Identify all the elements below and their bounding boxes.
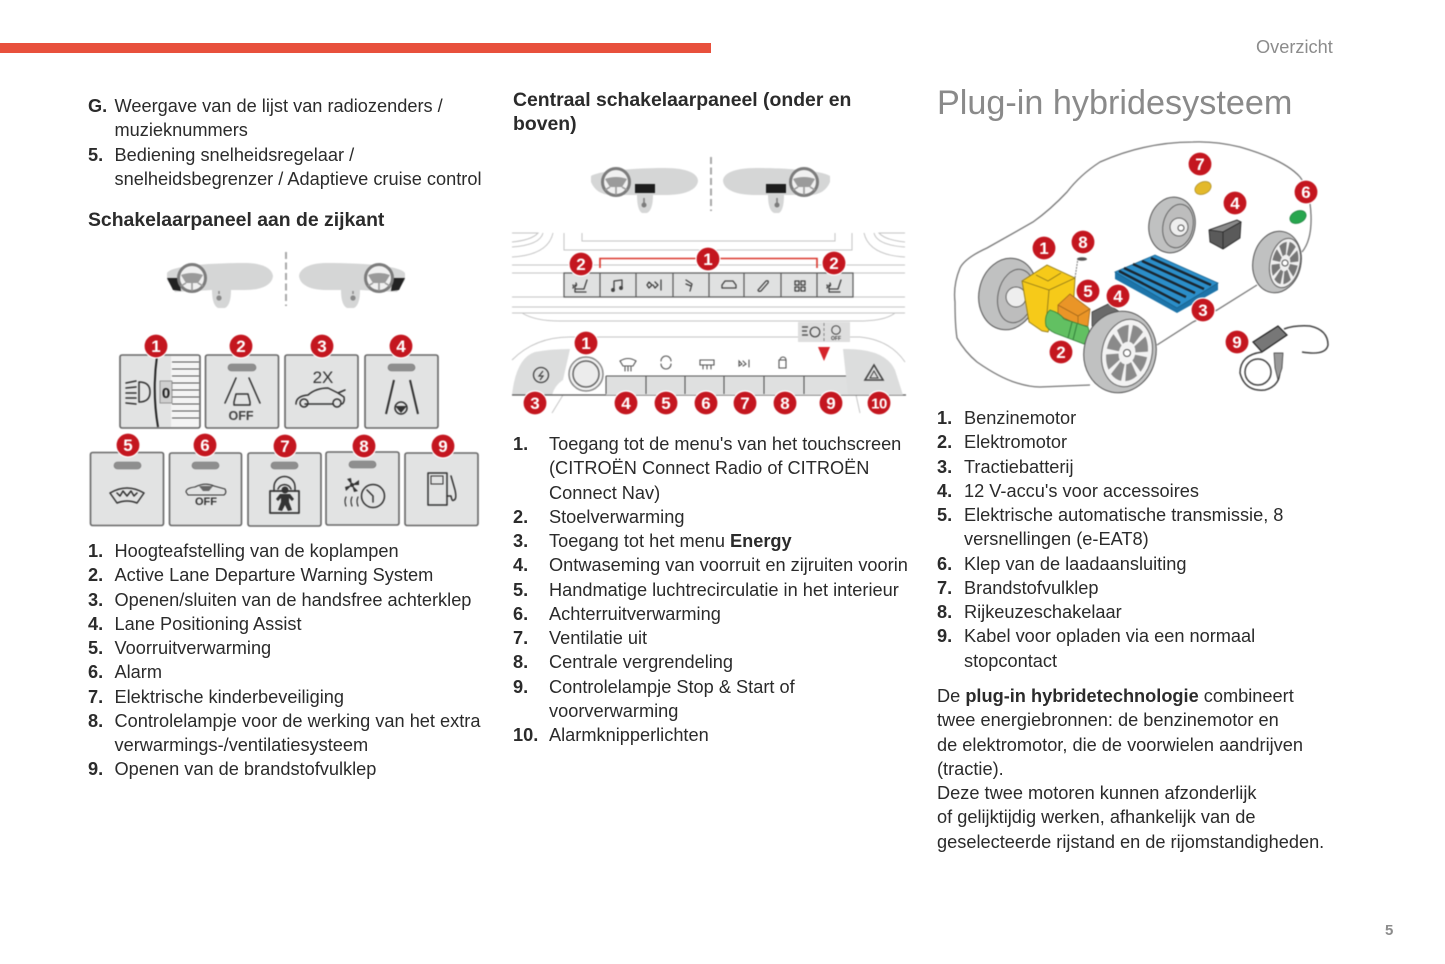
badge 2 left [569, 252, 593, 276]
12V battery front [1092, 304, 1120, 332]
list: central switch panel legend: 4. [513, 555, 528, 575]
list: side switch panel legend [88, 541, 480, 779]
list: hybrid system legend: 12 V-accu's voor accessoires [964, 481, 1199, 501]
list: central switch panel legend: 6. [513, 604, 528, 624]
green electric motor [1046, 310, 1089, 344]
text block: continued list G and 5: 5. [88, 145, 103, 165]
list: central switch panel legend: voorverwarming [549, 701, 678, 721]
callout 6: 6 [1301, 183, 1311, 202]
list: side switch panel legend: Controlelampje voor de werking van het extra [114, 711, 480, 731]
text block: hybrid technology explanation: de elektromotor, die de voorwielen aandrijven [937, 735, 1303, 755]
heading: central switch panel: Centraal schakelaarpaneel (onder en [513, 89, 851, 111]
list: central switch panel legend: Stoelverwarming [549, 507, 684, 527]
badge 10 lower: 10 [871, 396, 887, 412]
list: hybrid system legend: Tractiebatterij [964, 457, 1074, 477]
text block: continued list G and 5: Weergave van de lijst van radiozenders / [114, 96, 443, 116]
badge 4 lower [614, 391, 638, 415]
icon: left-hand drive locator, central panel [591, 168, 698, 213]
callout 2 [1049, 340, 1073, 364]
diagram: lower central switch panel [512, 322, 906, 415]
button 4: lane positioning assist [365, 334, 438, 428]
list: side switch panel legend: Voorruitverwarming [114, 638, 271, 658]
callout 2: 2 [1056, 343, 1066, 362]
badge 6 lower: 6 [701, 394, 711, 413]
section label: Overzicht: Overzicht [1256, 37, 1333, 57]
rear near wheel [1247, 227, 1307, 297]
list: hybrid system legend: Elektromotor [964, 432, 1067, 452]
badge 5: 5 [123, 436, 133, 455]
list: central switch panel legend: 7. [513, 628, 528, 648]
list: central switch panel legend: 10. [513, 725, 538, 745]
list: side switch panel legend: Alarm [114, 662, 162, 682]
badge 3 lower: 3 [530, 394, 540, 413]
callout 4 front: 4 [1113, 287, 1123, 306]
heading: side switch panel: Schakelaarpaneel aan de zijkant [88, 209, 384, 231]
list: central switch panel legend: 5. [513, 580, 528, 600]
button 6: alarm off [170, 433, 242, 526]
badge 1: 1 [151, 337, 161, 356]
callout 3 [1191, 298, 1215, 322]
charging flap marker [1288, 208, 1308, 226]
heading: central switch panel: boven) [513, 113, 577, 135]
pointer [818, 347, 830, 361]
button 6: alarm off: OFF [195, 496, 217, 508]
button 9: fuel flap [405, 434, 478, 526]
button 2: lane departure off [206, 334, 278, 428]
badge 10 lower [867, 391, 891, 415]
badge 8 lower [773, 391, 797, 415]
list: hybrid system legend: 4. [937, 481, 952, 501]
callout 8 [1071, 230, 1095, 254]
diagram: upper central switch panel [512, 233, 905, 321]
front near wheel [1076, 304, 1164, 400]
button 7: child lock [248, 434, 321, 526]
front far wheel [972, 253, 1044, 335]
callout 1: 1 [1039, 239, 1049, 258]
badge 2: 2 [236, 337, 246, 356]
blue traction battery [1115, 255, 1218, 313]
list: side switch panel legend: 5. [88, 638, 103, 658]
car outline [955, 142, 1311, 387]
12V battery rear [1209, 220, 1241, 249]
list: central switch panel legend [513, 434, 908, 745]
list: side switch panel legend: Openen/sluiten van de handsfree achterklep [114, 590, 471, 610]
inset: stop and start / AC off [798, 322, 850, 342]
list: hybrid system legend: Klep van de laadaansluiting [964, 554, 1186, 574]
list: side switch panel legend: verwarmings-/ventilatiesysteem [114, 735, 368, 755]
text block: continued list G and 5: snelheidsbegrenzer / Adaptieve cruise control [114, 169, 482, 189]
list: side switch panel legend: 1. [88, 541, 103, 561]
list: central switch panel legend: Handmatige luchtrecirculatie in het interieur [549, 580, 899, 600]
list: central switch panel legend: Ventilatie uit [549, 628, 647, 648]
list: central switch panel legend: 1. [513, 434, 528, 454]
list: central switch panel legend: 8. [513, 652, 528, 672]
button 3: handsfree tailgate [285, 334, 358, 428]
text block: hybrid technology explanation: De plug-in hybridetechnologie combineert [937, 686, 1294, 706]
list: side switch panel legend: Elektrische kinderbeveiliging [114, 687, 344, 707]
callout 4 rear: 4 [1230, 194, 1240, 213]
list: side switch panel legend: Hoogteafstelling van de koplampen [114, 541, 399, 561]
charging cable [1240, 326, 1328, 390]
button 1: headlamp height dial [120, 334, 200, 428]
orange transmission [1058, 294, 1090, 326]
list: central switch panel legend: Toegang tot de menu's van het touchscreen [549, 434, 901, 454]
badge 6 lower [694, 391, 718, 415]
list: side switch panel legend: 4. [88, 614, 103, 634]
fuel flap marker [1193, 179, 1213, 197]
callout 8: 8 [1078, 233, 1088, 252]
list: central switch panel legend: 2. [513, 507, 528, 527]
text block: continued list G and 5: Bediening snelheidsregelaar / [114, 145, 354, 165]
callout 3: 3 [1198, 301, 1208, 320]
callout 7: 7 [1195, 155, 1205, 174]
text block: continued list G and 5: muzieknummers [114, 120, 248, 140]
list: side switch panel legend: 8. [88, 711, 103, 731]
header bar [0, 43, 711, 53]
badge 9 lower: 9 [826, 394, 836, 413]
badge 5 lower: 5 [661, 394, 671, 413]
text block: hybrid technology explanation: of gelijktijdig werken, afhankelijk van de [937, 807, 1255, 827]
icon: right-hand drive locator, side panel [299, 263, 405, 308]
badge 3 lower [523, 391, 547, 415]
text block: hybrid technology explanation: twee energiebronnen: de benzinemotor en [937, 710, 1279, 730]
list: central switch panel legend: 9. [513, 677, 528, 697]
callout 9: 9 [1232, 333, 1242, 352]
list: side switch panel legend: Openen van de brandstofvulklep [114, 759, 376, 779]
callout 6 [1294, 180, 1318, 204]
list: side switch panel legend: 3. [88, 590, 103, 610]
list: hybrid system legend: Brandstofvulklep [964, 578, 1098, 598]
button 8: extra heating timer [326, 434, 399, 525]
list: side switch panel legend: Active Lane Departure Warning System [114, 565, 433, 585]
list: central switch panel legend: (CITROËN Connect Radio of CITROËN [549, 458, 869, 478]
list: hybrid system legend [937, 408, 1283, 671]
callout 9 [1225, 330, 1249, 354]
switch icons: upper row [573, 280, 841, 292]
list: hybrid system legend: 1. [937, 408, 952, 428]
list: central switch panel legend: Alarmknipperlichten [549, 725, 709, 745]
button 2: lane departure off: OFF [228, 409, 254, 423]
inset: stop and start / AC off: OFF [831, 336, 841, 342]
badge 9: 9 [438, 437, 448, 456]
callout 5 [1076, 279, 1100, 303]
badge 7 lower [733, 391, 757, 415]
list: hybrid system legend: Benzinemotor [964, 408, 1076, 428]
button 1: headlamp height dial: 0 [162, 385, 170, 402]
badge 4 lower: 4 [621, 394, 631, 413]
list: side switch panel legend: 6. [88, 662, 103, 682]
list: hybrid system legend: 7. [937, 578, 952, 598]
text block: hybrid technology explanation: geselecteerde rijstand en de rijomstandigheden. [937, 832, 1324, 852]
badge 8 lower: 8 [780, 394, 790, 413]
title: Plug-in hybridesysteem: Plug-in hybridesysteem [937, 84, 1292, 122]
list: central switch panel legend: Controlelampje Stop & Start of [549, 677, 795, 697]
small switch symbols [620, 356, 786, 371]
callout 1 [1032, 236, 1056, 260]
list: hybrid system legend: 5. [937, 505, 952, 525]
drive selector [1075, 257, 1087, 278]
text block: continued list G and 5 [88, 96, 482, 189]
list: side switch panel legend: Lane Positioning Assist [114, 614, 302, 634]
list: hybrid system legend: Rijkeuzeschakelaar [964, 602, 1122, 622]
list: central switch panel legend: Achterruitverwarming [549, 604, 721, 624]
badge 2 right: 2 [829, 254, 839, 273]
page number: 5 [1385, 922, 1393, 939]
badge 6: 6 [200, 436, 210, 455]
text block: continued list G and 5: G. [88, 96, 107, 116]
badge 5 lower [654, 391, 678, 415]
text block: hybrid technology explanation [937, 686, 1324, 852]
callout 4 rear [1223, 191, 1247, 215]
callout 4 front [1106, 284, 1130, 308]
yellow petrol engine [1022, 265, 1075, 332]
list: central switch panel legend: 3. [513, 531, 528, 551]
list: central switch panel legend: Connect Nav) [549, 483, 660, 503]
list: hybrid system legend: 2. [937, 432, 952, 452]
badge 1 lower: 1 [581, 334, 591, 353]
list: hybrid system legend: 3. [937, 457, 952, 477]
list: side switch panel legend: 2. [88, 565, 103, 585]
badge 4: 4 [396, 337, 406, 356]
list: central switch panel legend: Toegang tot het menu Energy [549, 531, 792, 551]
list: hybrid system legend: Kabel voor opladen via een normaal [964, 626, 1255, 646]
bracket [600, 258, 817, 268]
list: central switch panel legend: Ontwaseming van voorruit en zijruiten voorin [549, 555, 908, 575]
heading: central switch panel [513, 89, 851, 135]
badge 8: 8 [359, 437, 369, 456]
rear far wheel [1144, 193, 1200, 257]
diagram: plug-in hybrid car cutaway [955, 142, 1328, 400]
callout 7 [1188, 152, 1212, 176]
badge 9 lower [819, 391, 843, 415]
badge 2 left: 2 [576, 255, 586, 274]
list: hybrid system legend: 6. [937, 554, 952, 574]
list: hybrid system legend: Elektrische automatische transmissie, 8 [964, 505, 1283, 525]
badge 2 right [822, 251, 846, 275]
icon: left-hand drive locator, side panel [167, 263, 273, 308]
badge 1 top: 1 [703, 250, 713, 269]
button 5: windscreen heating [90, 433, 164, 526]
list: side switch panel legend: 7. [88, 687, 103, 707]
badge 1 lower [574, 331, 598, 355]
list: central switch panel legend: Centrale vergrendeling [549, 652, 733, 672]
icon: right-hand drive locator, central panel [723, 168, 830, 213]
text block: hybrid technology explanation: (tractie). [937, 759, 1004, 779]
list: hybrid system legend: 8. [937, 602, 952, 622]
list: hybrid system legend: stopcontact [964, 651, 1057, 671]
text block: hybrid technology explanation: Deze twee motoren kunnen afzonderlijk [937, 783, 1256, 803]
button 3: handsfree tailgate: 2X [313, 368, 333, 387]
callout 5: 5 [1083, 282, 1093, 301]
list: hybrid system legend: 9. [937, 626, 952, 646]
badge 3: 3 [317, 337, 327, 356]
badge 7: 7 [280, 437, 290, 456]
list: side switch panel legend: 9. [88, 759, 103, 779]
badge 1 top [696, 247, 720, 271]
badge 7 lower: 7 [740, 394, 750, 413]
list: hybrid system legend: versnellingen (e-EAT8) [964, 529, 1149, 549]
